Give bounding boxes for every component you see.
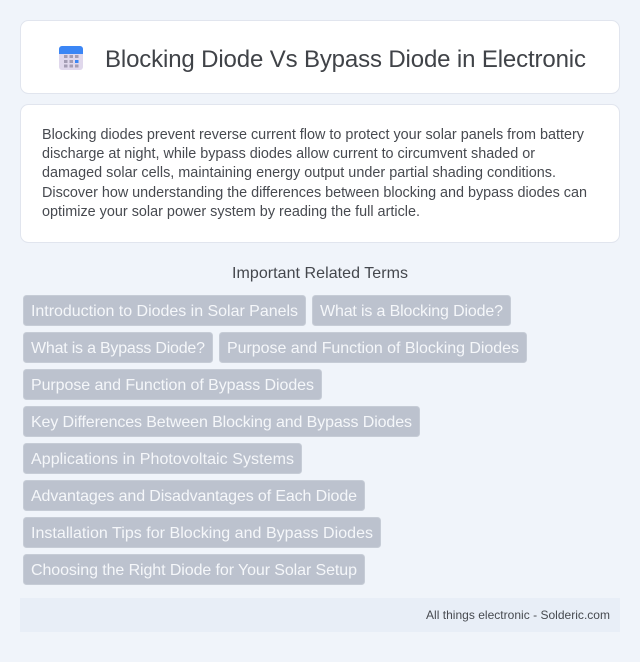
tag: introduction: Introduction to Diodes in Solar Panels (31, 303, 298, 320)
tag: advantages: Advantages and Disadvantages of Each Diode (31, 488, 357, 505)
tag: bypass diode (24, 332, 212, 362)
tag: advantages (24, 480, 364, 510)
icon: calendar (59, 46, 83, 70)
tag: bypass diode: What is a Bypass Diode? (31, 340, 205, 357)
panel: summary paragraph: optimize your solar power system by reading the full article. (42, 204, 420, 220)
panel: summary paragraph: discharge at night, while bypass diodes allow current to circumvent shaded or (42, 146, 535, 162)
tag: key differences (24, 406, 420, 436)
tag: purpose of blocking (220, 332, 526, 362)
tag: purpose of bypass (24, 370, 322, 400)
tag: blocking diode: What is a Blocking Diode? (320, 303, 503, 320)
tag: purpose of blocking: Purpose and Function of Blocking Diodes (227, 340, 519, 357)
heading: important related terms: Important Related Terms (232, 265, 408, 282)
panel: related term tags (24, 296, 526, 584)
tag: choosing the right diode (24, 554, 364, 584)
tag: blocking diode (312, 296, 510, 326)
tag: choosing the right diode: Choosing the Right Diode for Your Solar Setup (31, 562, 357, 579)
title: Blocking Diode Vs Bypass Diode in Electronic (105, 46, 586, 73)
panel: summary paragraph (20, 104, 620, 242)
tag: installation tips: Installation Tips for Blocking and Bypass Diodes (31, 525, 373, 542)
header panel (20, 20, 620, 94)
panel: summary paragraph: Discover how understanding the differences between blocking and bypass diodes can (42, 185, 587, 201)
tag: key differences: Key Differences Between Blocking and Bypass Diodes (31, 414, 412, 431)
tag: purpose of bypass: Purpose and Function of Bypass Diodes (31, 377, 314, 394)
tag: installation tips (24, 518, 380, 548)
footer (20, 598, 620, 632)
tag: introduction (24, 296, 306, 326)
tag: applications: Applications in Photovoltaic Systems (31, 451, 294, 468)
tag: applications (24, 444, 302, 474)
panel: summary paragraph: Blocking diodes prevent reverse current flow to protect your solar panels from battery (42, 127, 585, 143)
panel: summary paragraph: damaged solar cells, maintaining energy output under partial shading conditions. (42, 165, 556, 181)
footer: All things electronic - Solderic.com (426, 608, 610, 622)
